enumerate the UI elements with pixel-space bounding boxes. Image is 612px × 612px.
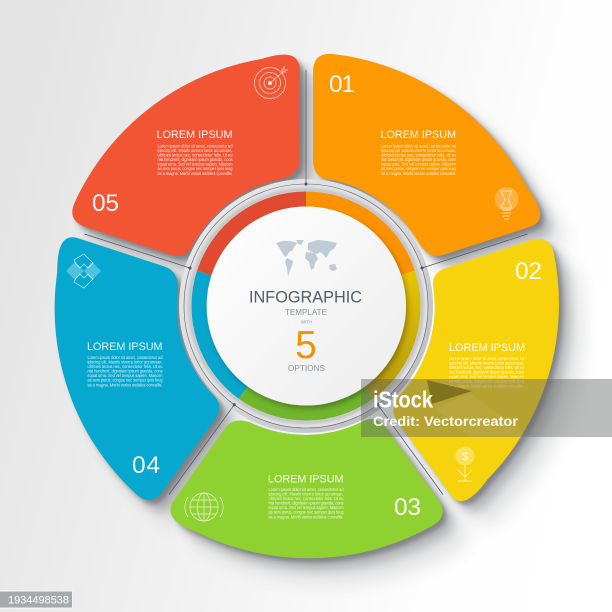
body text 01: equat urna. Sed vel tempus sapien. Maecen: [381, 162, 457, 167]
centre number 5: 5: [295, 324, 317, 367]
body text 01: ultricies lectus nec, consectetur felis. Ut eu: [381, 153, 457, 158]
panel 03: green: [170, 419, 443, 558]
body text 05: equat urna. Sed vel tempus sapien. Maecen: [158, 162, 233, 167]
panel shadows: [59, 58, 583, 582]
body text 02: as sem purus, congue nec semper quis feug: [449, 379, 525, 384]
body text 02: Lorem ipsum dolor sit amet, consectetur ad: [449, 356, 525, 361]
body text 01: nisi hendrerit, dignissim ipsum gravida, cons: [381, 157, 456, 162]
panel 01: orange: [313, 54, 540, 256]
heading 01: LOREM IPSUM: [380, 129, 456, 141]
body text 03: iat a magna. Morbi varius sodales convallis.: [268, 514, 344, 519]
body text 05: [158, 144, 233, 176]
world map: [276, 240, 337, 277]
icon: globe: [185, 493, 223, 521]
body text 05: ultricies lectus nec, consectetur felis. Ut eu: [158, 153, 233, 158]
body text 01: iat a magna. Morbi varius sodales convallis.: [381, 171, 456, 176]
body text 04: nisi hendrerit, dignissim ipsum gravida, cons: [88, 369, 162, 374]
body text 05: Lorem ipsum dolor sit amet, consectetur ad: [158, 144, 233, 148]
body text 03: ultricies lectus nec, consectetur felis. Ut eu: [268, 496, 344, 501]
number 01: 01: [329, 71, 355, 98]
body text 05: ipiscing elit. Mauris viverra tortor accumsan,: [158, 148, 232, 153]
heading 04: LOREM IPSUM: [87, 341, 162, 353]
body text 02: [449, 356, 525, 388]
image id badge: [0, 590, 73, 609]
body text 04: [88, 355, 163, 387]
body text 05: as sem purus, congue nec semper quis feug: [158, 166, 233, 171]
coloured ring: [199, 199, 413, 413]
body text 02: ipiscing elit. Mauris viverra tortor accumsan,: [449, 360, 524, 366]
panel 02: yellow: [393, 239, 559, 501]
watermark credit: Credit: Vectorcreator: [373, 413, 519, 429]
body text 04: equat urna. Sed vel tempus sapien. Maecen: [88, 373, 163, 378]
body text 03: ipiscing elit. Mauris viverra tortor accumsan,: [268, 492, 344, 496]
centre with: WITH: [301, 320, 312, 324]
body text 05: nisi hendrerit, dignissim ipsum gravida, cons: [158, 157, 232, 162]
watermark band: [361, 379, 612, 437]
number 04: 04: [132, 452, 160, 479]
body text 01: ipiscing elit. Mauris viverra tortor accumsan,: [381, 148, 456, 153]
number 05: 05: [92, 190, 119, 217]
centre options: OPTIONS: [288, 363, 325, 373]
body text 04: as sem purus, congue nec semper quis feug: [88, 378, 163, 383]
panel 05: red: [72, 55, 300, 256]
watermark brand: iStock: [373, 386, 433, 412]
body text 04: ipiscing elit. Mauris viverra tortor accumsan,: [88, 360, 162, 364]
image id badge: 1934498538: [8, 594, 69, 606]
centre circle: [207, 206, 406, 406]
number 02: 02: [515, 258, 542, 285]
body text 02: equat urna. Sed vel tempus sapien. Maecen: [449, 374, 525, 379]
body text 03: [268, 487, 344, 519]
centre subtitle: TEMPLATE: [285, 307, 327, 317]
panel 04: blue: [55, 237, 219, 500]
body text 01: [381, 144, 457, 176]
number 03: 03: [394, 494, 421, 521]
body text 02: iat a magna. Morbi varius sodales convallis.: [449, 383, 524, 388]
icon: dollar plant: [456, 446, 474, 481]
body text 02: ultricies lectus nec, consectetur felis. Ut eu: [449, 365, 525, 370]
body text 04: ultricies lectus nec, consectetur felis. Ut eu: [88, 364, 163, 369]
icon: dollar plant: $: [462, 451, 468, 463]
body text 02: nisi hendrerit, dignissim ipsum gravida, cons: [449, 370, 524, 375]
centre title: INFOGRAPHIC: [249, 288, 362, 307]
body text 03: Lorem ipsum dolor sit amet, consectetur ad: [268, 487, 344, 492]
heading 02: LOREM IPSUM: [449, 342, 525, 354]
body text 04: iat a magna. Morbi varius sodales convallis.: [88, 382, 162, 387]
body text 01: Lorem ipsum dolor sit amet, consectetur ad: [381, 144, 457, 148]
icon: light bulb: [494, 187, 518, 219]
body text 03: as sem purus, congue nec semper quis feug: [268, 510, 344, 515]
metallic hub ring: [179, 179, 433, 433]
icon: target: [254, 66, 288, 98]
body text 03: nisi hendrerit, dignissim ipsum gravida, cons: [268, 501, 344, 506]
connector lines: [84, 70, 528, 494]
icon: puzzle: [66, 254, 101, 288]
body text 04: Lorem ipsum dolor sit amet, consectetur ad: [88, 355, 163, 360]
body text 05: iat a magna. Morbi varius sodales convallis.: [158, 171, 232, 176]
body text 01: as sem purus, congue nec semper quis feug: [381, 166, 457, 171]
heading 03: LOREM IPSUM: [268, 473, 344, 485]
body text 03: equat urna. Sed vel tempus sapien. Maecen: [268, 505, 344, 510]
heading 05: LOREM IPSUM: [156, 129, 232, 141]
